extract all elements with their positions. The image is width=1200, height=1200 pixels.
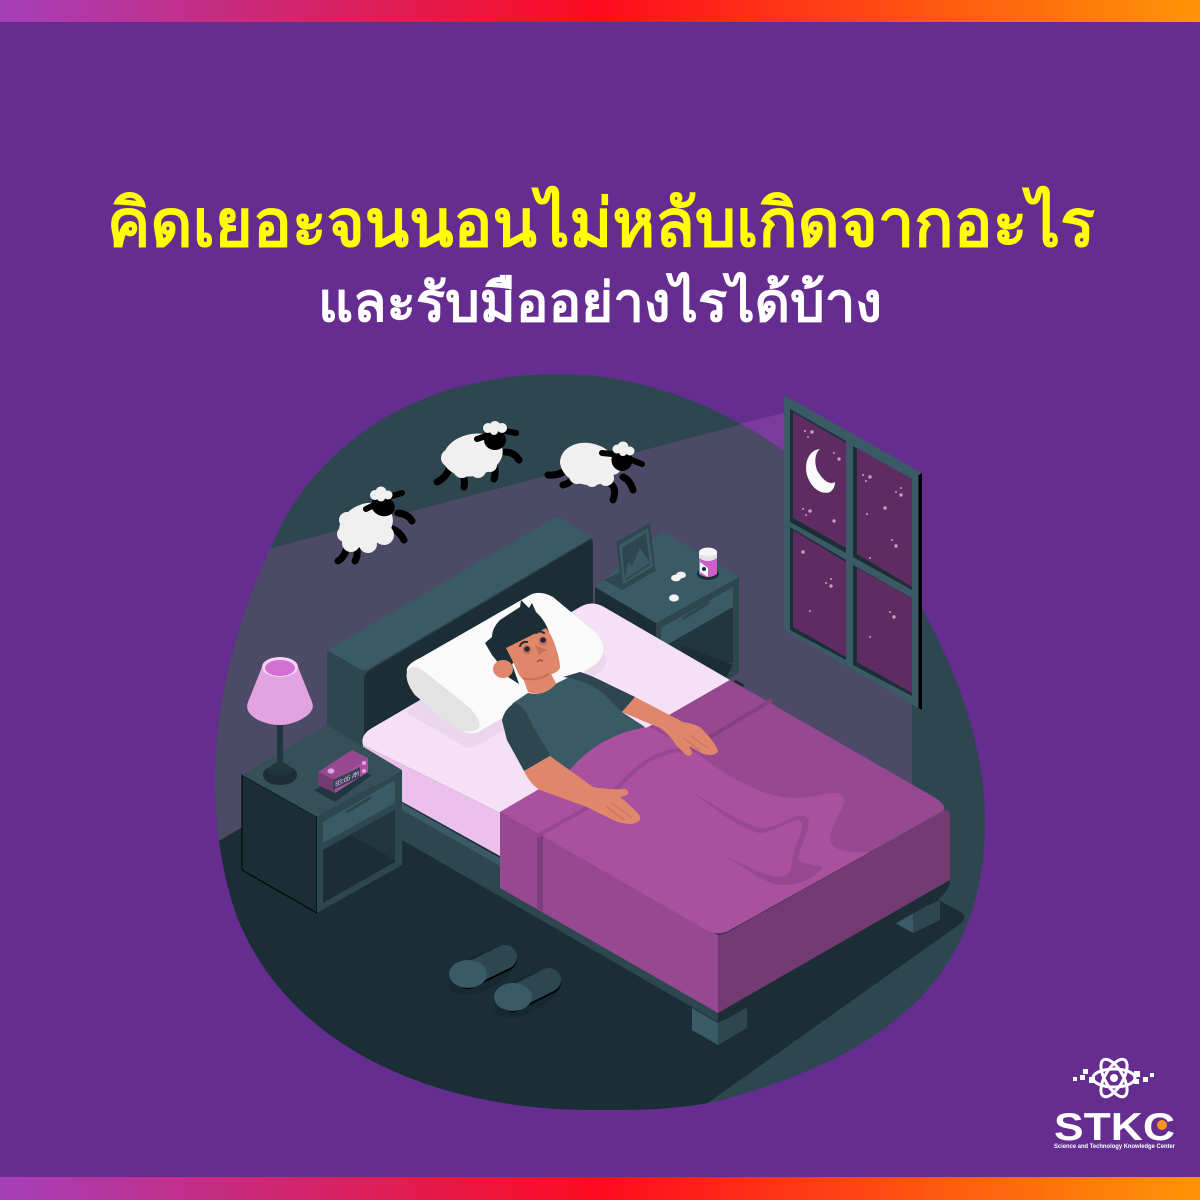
top gradient bar bbox=[0, 0, 1200, 22]
man's head bbox=[485, 600, 560, 694]
sheep 1 bbox=[332, 486, 412, 561]
table lamp bbox=[247, 657, 313, 785]
logo tagline: Science and Technology Knowledge Center bbox=[1054, 1144, 1176, 1150]
pills bbox=[669, 572, 686, 602]
headboard bbox=[327, 518, 593, 760]
left nightstand bbox=[242, 725, 402, 913]
mattress bbox=[362, 604, 730, 856]
logo wordmark: STKC bbox=[1054, 1106, 1175, 1149]
alarm clock: 83:66 AM bbox=[335, 770, 359, 790]
logo pixel squares bbox=[1073, 1069, 1154, 1084]
right nightstand bbox=[595, 523, 745, 690]
sheep 3 bbox=[548, 438, 642, 500]
logo: STKC bbox=[1054, 1055, 1176, 1150]
slippers bbox=[442, 940, 567, 1027]
moonlight beam outside the blob bbox=[735, 413, 784, 452]
icon: atom bbox=[1093, 1055, 1135, 1101]
bed base bbox=[402, 803, 718, 1022]
alarm clock bbox=[314, 750, 372, 802]
bed legs bbox=[692, 900, 940, 1045]
medicine bottle bbox=[697, 548, 719, 580]
man's arms bbox=[524, 697, 718, 824]
blanket wrinkles bbox=[692, 792, 823, 885]
icon: crescent moon bbox=[806, 449, 835, 493]
title: คิดเยอะจนนอนไม่หลับเกิดจากอะไร bbox=[107, 185, 1095, 260]
room backdrop blob bbox=[215, 374, 985, 1110]
pillow bbox=[405, 593, 606, 748]
man's shirt bbox=[502, 672, 645, 772]
sheep 2 bbox=[437, 421, 519, 487]
picture frame bbox=[604, 523, 657, 590]
bottom gradient bar bbox=[0, 1177, 1200, 1200]
logo orange dot bbox=[1157, 1120, 1167, 1130]
blanket bbox=[500, 680, 950, 1021]
shirt sleeves bbox=[502, 672, 635, 771]
subtitle: และรับมืออย่างไรได้บ้าง bbox=[318, 271, 882, 333]
illustration: bedroom scene bbox=[215, 374, 985, 1110]
window bbox=[784, 395, 922, 710]
man bbox=[485, 600, 645, 772]
